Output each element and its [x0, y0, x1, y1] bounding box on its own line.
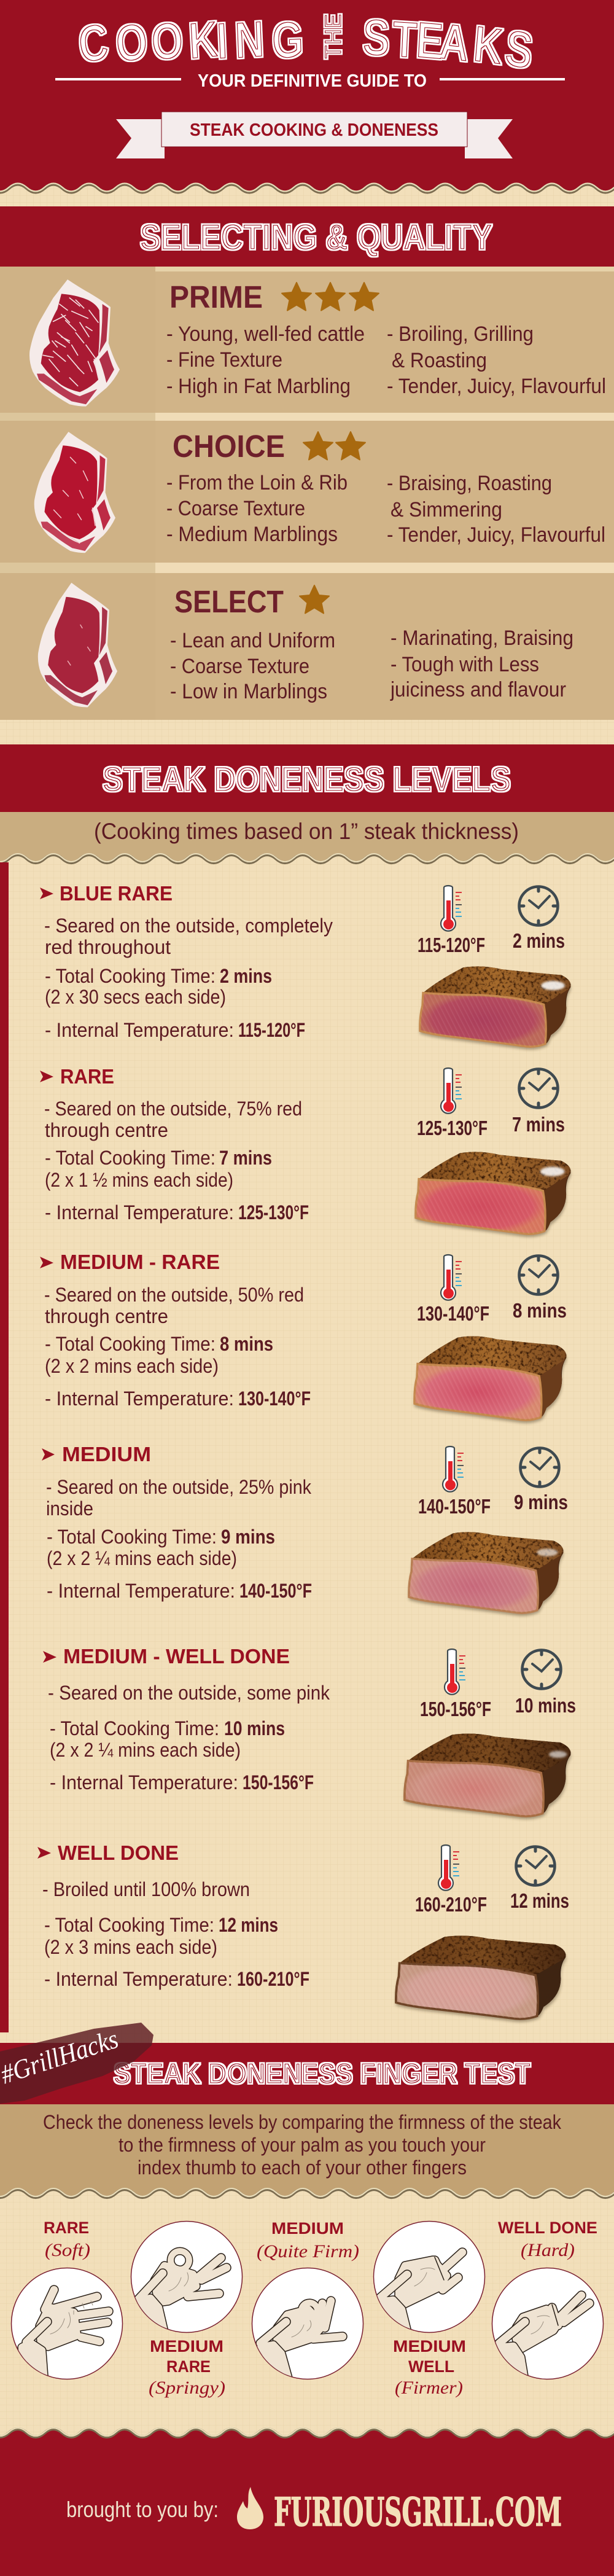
heading: medium rare: MEDIUM - RARE: [60, 1251, 220, 1273]
description: - Internal Temperature:: [47, 1580, 235, 1602]
panel: finger test intro: to the firmness of your palm as you touch your: [119, 2134, 486, 2156]
label: rare soft: RARE: [44, 2219, 89, 2237]
panel: finger test intro: index thumb to each of your other fingers: [138, 2156, 467, 2179]
description: 115-120°F: [238, 1019, 305, 1041]
description: 140-150°F: [239, 1580, 312, 1602]
arrow: [37, 1847, 51, 1859]
panel: medium rare: [40, 1251, 567, 1423]
heading: choice: CHOICE: [173, 429, 285, 464]
panel: well done: [37, 1841, 569, 2022]
select characteristics: - Lean and Uniform: [170, 629, 335, 652]
icon: thermometer: [438, 1845, 459, 1891]
illustration: ring finger touch: [373, 2221, 485, 2334]
description: (2 x 2 ¼ mins each side): [47, 1547, 237, 1569]
choice uses: - Braising, Roasting: [387, 472, 552, 495]
icon: thermometer: [441, 1068, 462, 1114]
description: 130-140°F: [238, 1388, 311, 1410]
description: [44, 1284, 311, 1410]
steak: well done: [396, 1935, 565, 2022]
description: - Broiled until 100% brown: [42, 1878, 250, 1900]
description: - Total Cooking Time:: [47, 1526, 217, 1548]
temperature label: 125-130°F: [417, 1117, 488, 1139]
icon: flame: [237, 2487, 263, 2529]
description: - Seared on the outside, 25% pink: [46, 1476, 312, 1498]
steak: medium well: [405, 1733, 570, 1819]
heading: prime: PRIME: [169, 279, 263, 314]
label: rare soft: (Soft): [45, 2240, 90, 2260]
brush badge: grill hacks: #GrillHacks: [0, 2024, 122, 2090]
description: red throughout: [45, 936, 171, 958]
description: - Seared on the outside, 75% red: [44, 1098, 302, 1120]
panel: prime: [29, 279, 606, 407]
description: inside: [46, 1497, 93, 1520]
select uses: juiciness and flavour: [390, 678, 566, 701]
icon: choice raw steak: [34, 432, 115, 553]
description: - Total Cooking Time:: [45, 965, 216, 987]
prime uses: - Broiling, Grilling: [387, 322, 534, 346]
heading: blue rare: BLUE RARE: [60, 882, 173, 905]
label: medium well firmer: (Firmer): [395, 2378, 463, 2398]
description: [48, 1682, 330, 1793]
hand test: well done: [492, 2219, 603, 2383]
description: - Internal Temperature:: [45, 1201, 234, 1224]
arrow: [40, 1257, 53, 1268]
heading: medium: MEDIUM: [62, 1443, 151, 1466]
description: through centre: [45, 1119, 168, 1141]
label: medium rare springy: RARE: [166, 2357, 211, 2376]
icon: thermometer: [445, 1649, 465, 1695]
select characteristics: - Coarse Texture: [170, 655, 309, 678]
icon: thermometer: [441, 886, 462, 931]
icon: three stars: [282, 283, 379, 311]
description: - Total Cooking Time:: [44, 1914, 214, 1936]
arrow: [40, 888, 53, 899]
description: - Seared on the outside, completely: [44, 915, 333, 937]
icon: thermometer: [443, 1446, 464, 1492]
label: medium well firmer: [393, 2337, 466, 2398]
description: 9 mins: [221, 1526, 275, 1548]
description: [42, 1878, 309, 1990]
band: cooking times note: [0, 812, 614, 862]
description: - Internal Temperature:: [50, 1771, 238, 1793]
steak: medium rare: [414, 1336, 566, 1423]
illustration: little finger touch: [492, 2268, 603, 2383]
description: (2 x 2 ¼ mins each side): [50, 1739, 241, 1761]
arrow: [42, 1448, 55, 1461]
time label: 7 mins: [512, 1113, 565, 1136]
prime characteristics: - Young, well-fed cattle: [166, 322, 365, 346]
description: - Seared on the outside, 50% red: [44, 1284, 304, 1306]
panel: select: [38, 583, 573, 708]
subtitle with rules: YOUR DEFINITIVE GUIDE TO: [198, 71, 427, 91]
panel: blue rare: [40, 882, 570, 1050]
title: cooking the steaks: STEAKS: [362, 9, 536, 80]
panel: choice: [34, 429, 605, 553]
icon: prime raw steak: [29, 279, 120, 407]
description: 2 mins: [220, 965, 272, 987]
band: cooking times note: (Cooking times based on 1” steak thickness): [94, 819, 519, 844]
description: 10 mins: [224, 1717, 285, 1739]
heading: well done: WELL DONE: [58, 1841, 179, 1864]
section heading band: steak doneness levels: STEAK DONENESS LEVELS: [103, 760, 511, 799]
footer credit: brought to you by:: [66, 2497, 219, 2522]
label: medium rare springy: [149, 2337, 225, 2398]
description: - Total Cooking Time:: [45, 1333, 216, 1355]
illustration: index finger touch: [131, 2221, 242, 2334]
section heading band: finger test: STEAK DONENESS FINGER TEST: [114, 2057, 530, 2090]
time label: 12 mins: [510, 1889, 569, 1912]
temperature label: 115-120°F: [418, 934, 485, 956]
icon: select raw steak: [38, 583, 117, 708]
title: cooking the steaks: THE: [320, 14, 347, 59]
choice uses: & Simmering: [391, 498, 502, 521]
steak: medium: [409, 1532, 564, 1616]
panel: finger test intro: [0, 2104, 614, 2198]
left accent bar: [0, 862, 9, 2032]
description: 7 mins: [219, 1147, 272, 1169]
icon: clock: [521, 1448, 559, 1486]
prime characteristics: - High in Fat Marbling: [166, 375, 351, 398]
heading: medium well done: MEDIUM - WELL DONE: [63, 1645, 290, 1668]
description: (2 x 1 ½ mins each side): [45, 1169, 233, 1191]
choice characteristics: - From the Loin & Rib: [166, 471, 348, 494]
section heading band: steak doneness levels: [0, 744, 614, 812]
hand test: rare: [11, 2219, 123, 2383]
description: 12 mins: [219, 1914, 278, 1936]
subtitle with rules: [55, 71, 565, 91]
hand test: medium: [252, 2219, 363, 2380]
icon: one star: [300, 585, 329, 613]
description: - Internal Temperature:: [44, 1968, 233, 1990]
ribbon banner: STEAK COOKING & DONENESS: [190, 120, 438, 140]
panel: medium: [42, 1443, 568, 1616]
temperature label: 130-140°F: [417, 1302, 489, 1325]
time label: 8 mins: [513, 1299, 567, 1322]
time label: 9 mins: [514, 1491, 568, 1513]
description: 125-130°F: [238, 1201, 309, 1224]
time label: 10 mins: [515, 1694, 576, 1717]
description: [44, 915, 333, 1041]
description: 160-210°F: [237, 1968, 309, 1990]
hand test: medium rare: [131, 2221, 242, 2398]
choice uses: [387, 472, 605, 547]
choice characteristics: [166, 471, 348, 546]
time label: 2 mins: [513, 929, 565, 952]
description: 8 mins: [220, 1333, 273, 1355]
temperature label: 150-156°F: [420, 1698, 491, 1720]
arrow: [40, 1071, 53, 1082]
title: cooking the steaks: COOKING: [76, 10, 305, 75]
prime uses: & Roasting: [392, 349, 487, 372]
label: well done hard: (Hard): [521, 2240, 575, 2260]
choice characteristics: - Medium Marblings: [166, 523, 338, 546]
panel: medium well done: [43, 1645, 576, 1819]
heading: rare: RARE: [60, 1065, 114, 1088]
prime uses: [387, 322, 606, 398]
illustration: middle finger touch: [252, 2268, 363, 2380]
prime characteristics: - Fine Texture: [166, 348, 282, 372]
icon: clock: [519, 1255, 558, 1295]
label: well done hard: WELL DONE: [498, 2219, 597, 2237]
description: (2 x 30 secs each side): [45, 986, 226, 1008]
section heading band: selecting and quality: [0, 206, 614, 267]
label: medium rare springy: MEDIUM: [150, 2337, 223, 2355]
heading: select: SELECT: [174, 584, 284, 619]
tan row backgrounds: [0, 267, 614, 720]
temperature label: 140-150°F: [418, 1495, 491, 1518]
footer panel: [0, 2428, 614, 2576]
description: [44, 1098, 309, 1224]
description: - Seared on the outside, some pink: [48, 1682, 330, 1704]
illustration: open hand: [11, 2268, 123, 2383]
icon: thermometer: [441, 1255, 462, 1300]
steak: rare: [416, 1152, 570, 1237]
description: [46, 1476, 312, 1602]
label: medium well firmer: WELL: [408, 2357, 454, 2376]
select uses: [390, 626, 573, 701]
section heading band: finger test: [0, 2023, 614, 2104]
select uses: - Marinating, Braising: [391, 626, 573, 650]
header panel: [0, 0, 614, 192]
panel: finger test intro: Check the doneness levels by comparing the firmness of the steak: [43, 2111, 562, 2133]
temperature label: 160-210°F: [415, 1893, 487, 1916]
icon: clock: [519, 1069, 558, 1108]
steak: blue rare: [420, 966, 570, 1050]
panel: rare: [40, 1065, 570, 1237]
title: cooking the steaks: [76, 9, 536, 80]
description: - Internal Temperature:: [45, 1019, 234, 1041]
description: - Internal Temperature:: [45, 1388, 234, 1410]
label: well done hard: [498, 2219, 597, 2260]
icon: clock: [519, 887, 558, 925]
hand test: medium well: [373, 2221, 485, 2398]
arrow: [43, 1651, 56, 1663]
description: 150-156°F: [243, 1771, 314, 1793]
label: medium quite firm: [257, 2219, 359, 2262]
icon: clock: [516, 1846, 555, 1886]
description: (2 x 2 mins each side): [45, 1355, 219, 1377]
icon: two stars: [303, 432, 365, 459]
label: medium quite firm: (Quite Firm): [257, 2241, 359, 2262]
select uses: - Tough with Less: [391, 653, 539, 676]
choice characteristics: - Coarse Texture: [166, 497, 305, 520]
description: through centre: [45, 1305, 168, 1327]
icon: clock: [522, 1650, 561, 1689]
description: (2 x 3 mins each side): [44, 1936, 217, 1958]
ribbon banner: [116, 112, 513, 158]
label: rare soft: [44, 2219, 90, 2260]
select characteristics: - Low in Marblings: [170, 680, 327, 703]
description: - Total Cooking Time:: [50, 1717, 219, 1739]
section heading band: selecting and quality: SELECTING & QUALITY: [140, 217, 492, 257]
select characteristics: [170, 629, 335, 703]
label: medium well firmer: MEDIUM: [393, 2337, 466, 2355]
prime characteristics: [166, 322, 365, 398]
description: - Total Cooking Time:: [45, 1147, 216, 1169]
label: medium rare springy: (Springy): [149, 2378, 225, 2398]
label: medium quite firm: MEDIUM: [271, 2219, 344, 2238]
